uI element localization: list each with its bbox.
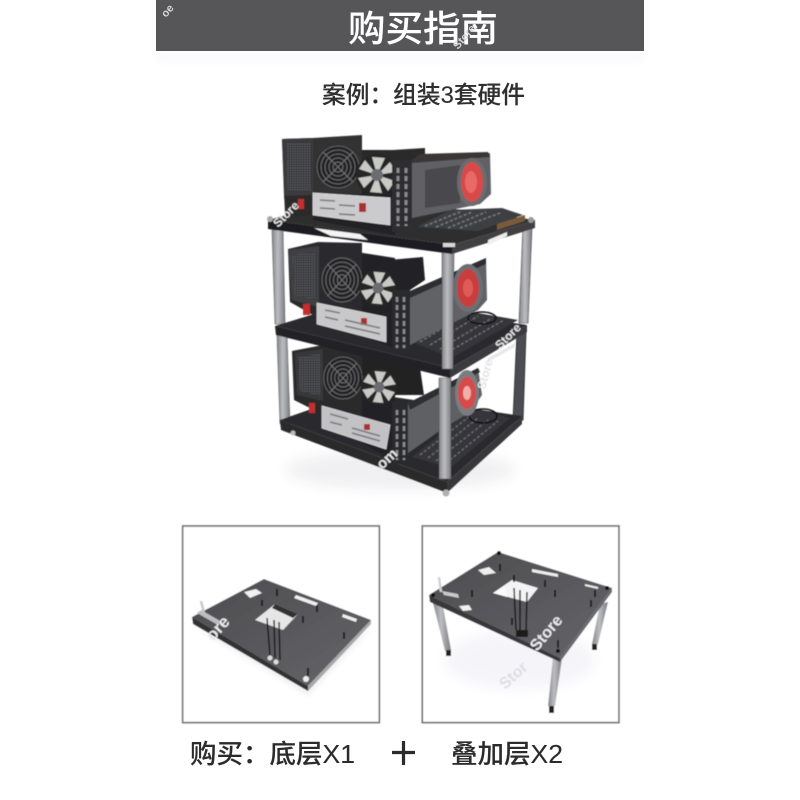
heading: purchase guide: 购买指南 [348, 8, 498, 49]
rack watermarks [270, 198, 524, 473]
cooler [362, 356, 424, 395]
IO plate [317, 303, 386, 342]
hardware backdrop [313, 150, 395, 235]
watermark on header: oe [159, 2, 177, 20]
motherboard [417, 208, 523, 231]
lower front leg [439, 378, 451, 479]
watermark: ore [202, 612, 234, 645]
rack watermarks: Store [474, 357, 496, 391]
bracket [439, 577, 441, 592]
middle shelf [275, 300, 527, 378]
center cutout [255, 604, 298, 630]
layer 3 hardware [292, 345, 510, 468]
panel: stack layer [422, 526, 619, 723]
motherboard [412, 310, 518, 358]
power supply [292, 345, 362, 420]
hardware backdrop [323, 350, 395, 462]
risers [514, 588, 527, 634]
label: stack layer x2: 叠加层X2 [451, 739, 563, 769]
back right legs [513, 226, 532, 420]
icon: plus [392, 741, 415, 765]
power supply [288, 242, 362, 318]
rack watermarks: Store [492, 320, 524, 352]
motherboard [412, 408, 510, 468]
watermark: Store [527, 612, 566, 655]
icon: stack plate [429, 551, 612, 662]
IO plate [313, 193, 390, 225]
header bar [156, 0, 644, 63]
rack floor shadow [285, 450, 515, 490]
graphics card [412, 153, 491, 218]
IO plate [322, 406, 390, 449]
rack watermarks: om [373, 445, 401, 473]
standoffs [472, 564, 595, 648]
risers [267, 618, 280, 660]
legs [433, 601, 608, 713]
power supply [282, 135, 362, 214]
graphics card [410, 258, 487, 345]
layer 1 hardware [282, 135, 525, 235]
hardware backdrop [318, 246, 395, 348]
center cutout [493, 580, 538, 602]
base plate shadow [192, 625, 371, 696]
left legs [272, 230, 290, 424]
rack watermarks: Store [270, 198, 302, 230]
bottom shelf [280, 392, 522, 496]
slots [244, 589, 262, 598]
graphics card [408, 368, 482, 453]
panel: base layer [183, 526, 379, 723]
subheading: example: 案例：组装3套硬件 [322, 75, 525, 110]
top shelf [267, 196, 535, 254]
watermark: Stor [496, 659, 531, 693]
three-layer rack with hardware [267, 135, 535, 496]
cooler [362, 148, 425, 190]
cooler [367, 257, 425, 300]
label: base layer x1: 购买：底层X1 [190, 734, 355, 771]
standoffs [262, 589, 344, 676]
watermark [496, 612, 566, 693]
upper front leg [442, 252, 454, 369]
watermark across heading: Store [451, 23, 478, 52]
bracket [201, 601, 205, 617]
layer 2 hardware [288, 242, 518, 358]
floor shadow [445, 632, 595, 688]
slots [478, 567, 496, 575]
icon: base plate [192, 579, 371, 691]
